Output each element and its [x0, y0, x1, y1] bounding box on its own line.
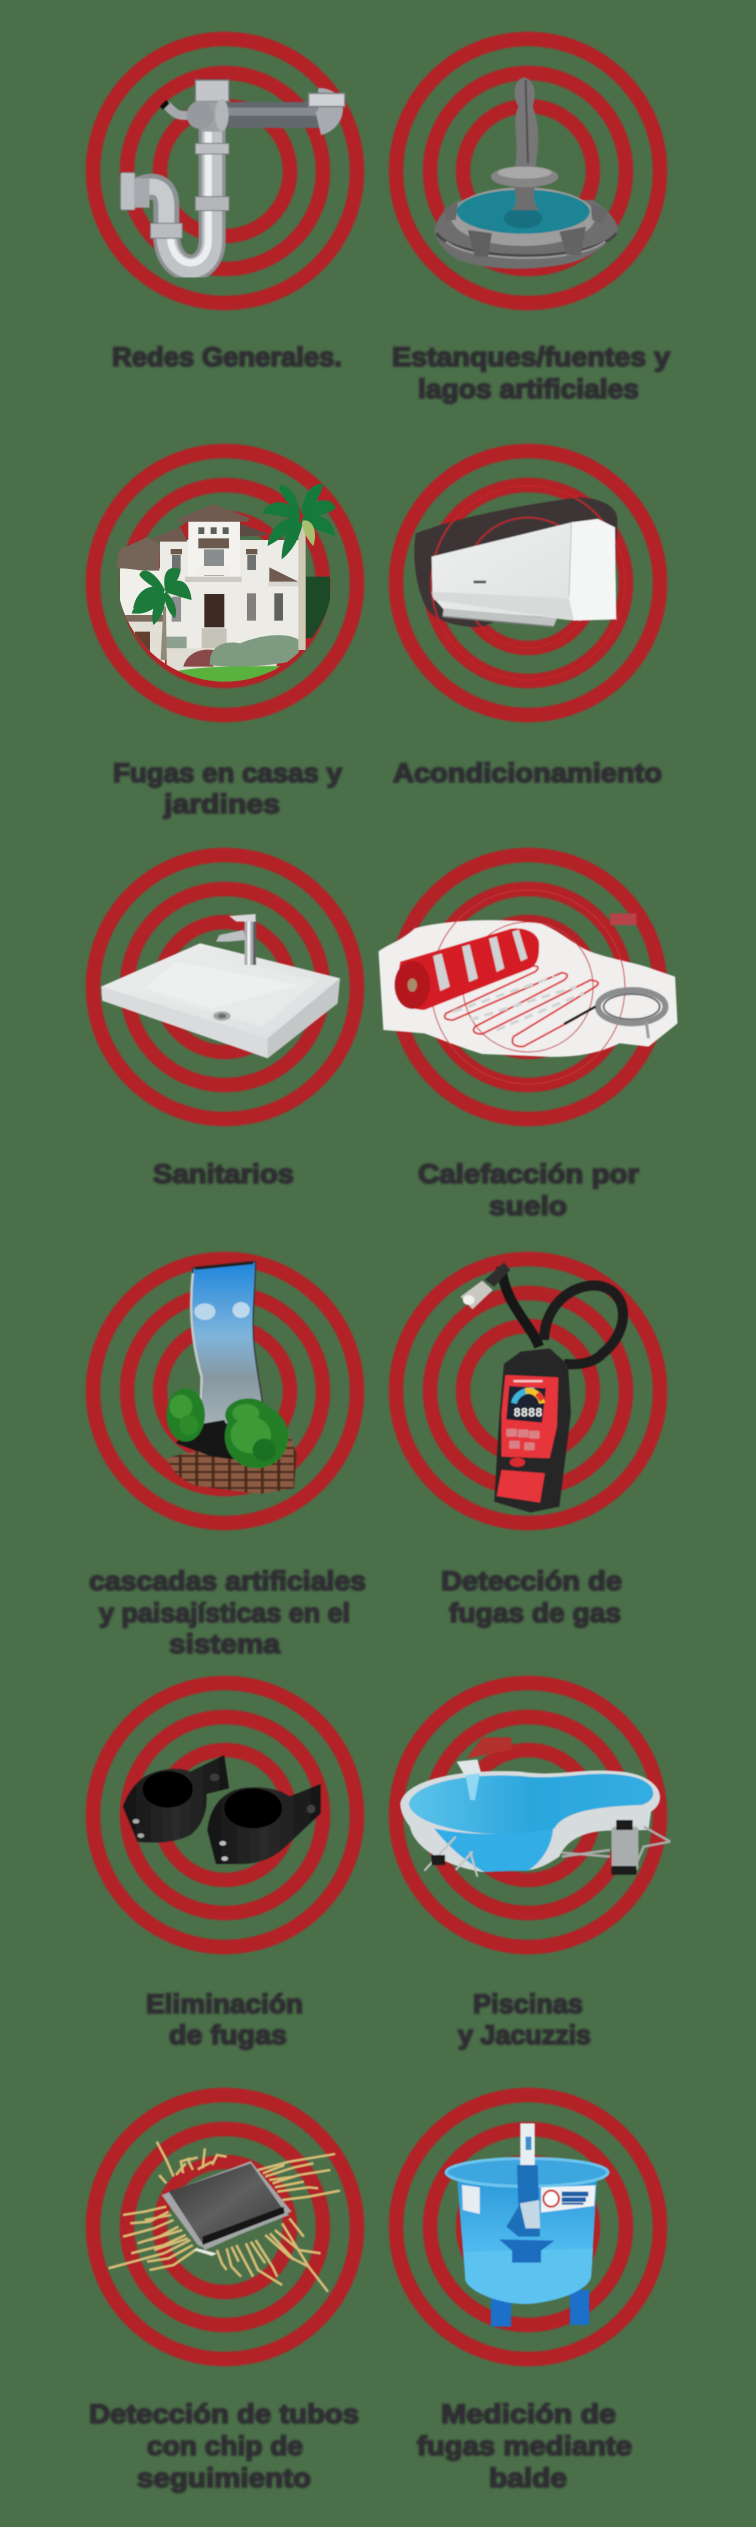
icon: concentric red rings	[396, 855, 660, 1119]
label: cascadas artificiales	[89, 1566, 366, 1596]
icon: concentric red rings	[396, 1259, 660, 1523]
label: Medición de	[441, 2399, 616, 2429]
icon: concentric red rings	[396, 2095, 660, 2359]
panel: piscinas y jacuzzis	[396, 1683, 670, 2050]
panel: calefaccion por suelo	[379, 855, 677, 1221]
label: Detección de tubos	[89, 2399, 359, 2429]
label: Piscinas	[473, 1989, 583, 2019]
label: lagos artificiales	[418, 374, 639, 404]
icon: swimming pool with filter	[400, 1737, 670, 1877]
icon: concentric red rings	[396, 39, 660, 303]
panel: medicion de fugas mediante balde	[396, 2095, 660, 2493]
panel: fugas en casas y jardines	[93, 451, 357, 819]
icon: black pipe clamps	[123, 1755, 321, 1864]
panel: deteccion de fugas de gas	[396, 1259, 660, 1628]
icon: concentric red rings	[396, 451, 660, 715]
label: Sanitarios	[153, 1159, 294, 1189]
icon: concentric red rings	[93, 39, 357, 303]
icon: wall air conditioner	[414, 486, 625, 680]
label: y Jacuzzis	[458, 2020, 591, 2050]
label	[146, 1989, 303, 2050]
icon: underfloor heating mat	[379, 890, 677, 1084]
panel: deteccion de tubos	[89, 2095, 359, 2493]
icon: microchip with gold traces	[108, 2142, 340, 2292]
label: Fugas en casas y	[113, 758, 342, 788]
label: sistema	[169, 1629, 281, 1659]
label: jardines	[163, 789, 280, 819]
label	[89, 2399, 359, 2493]
label: Detección de	[441, 1566, 622, 1596]
label: Calefacción por	[418, 1159, 640, 1189]
icon: concentric red rings	[396, 1683, 660, 1947]
icon: water wall with bushes	[166, 1262, 297, 1494]
label	[392, 342, 670, 404]
label	[417, 2399, 632, 2493]
label: Estanques/fuentes y	[392, 342, 670, 372]
icon: gas leak detector: 8888	[514, 1405, 543, 1421]
icon: blue test bucket	[446, 2123, 608, 2327]
panel: eliminacion de fugas	[93, 1683, 357, 2050]
label: Acondicionamiento	[393, 758, 662, 788]
label: Eliminación	[146, 1989, 303, 2019]
icon: gas leak detector	[461, 1263, 623, 1513]
icon: concentric red rings	[93, 1683, 357, 1947]
label: seguimiento	[137, 2463, 311, 2493]
label: con chip de	[147, 2431, 303, 2461]
icon: stone fountain	[434, 77, 618, 269]
label: de fugas	[169, 2020, 287, 2050]
label: suelo	[489, 1191, 567, 1221]
label: fugas de gas	[449, 1598, 621, 1628]
label: balde	[489, 2463, 567, 2493]
label	[89, 1566, 366, 1659]
panel: estanques y fuentes	[392, 39, 670, 404]
icon: white sink with faucet	[101, 914, 340, 1058]
label	[113, 758, 342, 819]
icon: concentric red rings	[93, 2095, 357, 2359]
icon: concentric red rings	[93, 1259, 357, 1523]
label	[418, 1159, 640, 1221]
icon: house with palm trees	[115, 484, 336, 683]
label	[458, 1989, 591, 2050]
panel: acondicionamiento	[393, 451, 662, 788]
panel: cascadas artificiales	[89, 1259, 366, 1659]
label: Redes Generales.	[112, 342, 342, 372]
panel: redes generales	[93, 39, 357, 372]
icon: concentric red rings	[93, 451, 357, 715]
icon: concentric red rings	[93, 855, 357, 1119]
label	[441, 1566, 622, 1628]
label: fugas mediante	[417, 2431, 632, 2461]
icon: chrome drain pipe	[121, 80, 345, 268]
panel: sanitarios	[93, 855, 357, 1189]
label: y paisajísticas en el	[99, 1598, 350, 1628]
